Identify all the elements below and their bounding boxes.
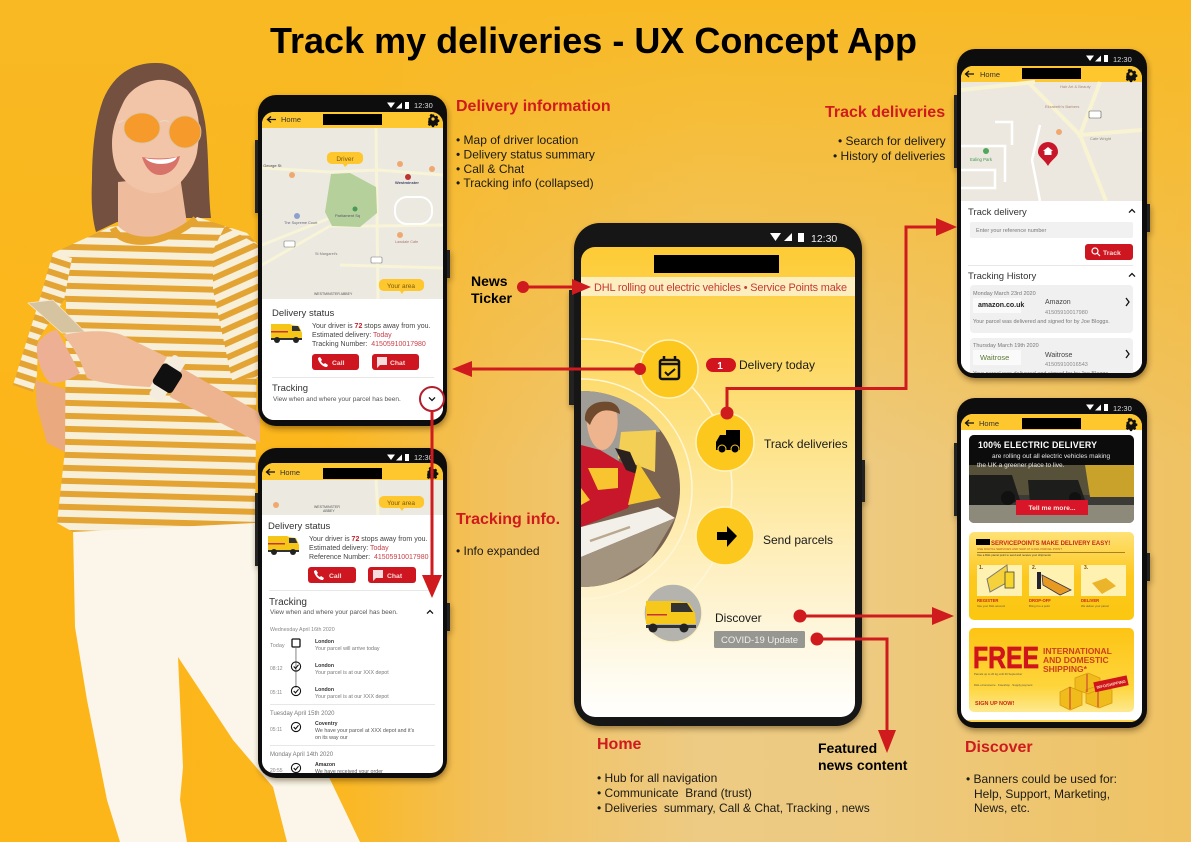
phone frame (569, 223, 865, 726)
banner: free shipping: Parcels up to 20 kg until 30 September (974, 672, 1022, 676)
label: discover: Discover (965, 739, 1033, 756)
collapse chevron (427, 611, 433, 614)
arrow: expand tracking to tracking info (420, 387, 444, 598)
your area bubble (379, 496, 424, 511)
timeline text: Tuesday April 15th 2020 (270, 711, 335, 717)
track deliveries bullets: • Search for delivery (838, 134, 946, 148)
map: Ealing Park (970, 157, 993, 162)
banner: free shipping: FREE (973, 640, 1039, 675)
history card: waitrose (970, 338, 1133, 373)
banner: servicepoints: We deliver your parcel (1081, 604, 1109, 608)
arrow: discover (794, 607, 954, 625)
neck (118, 176, 187, 240)
track button (1085, 244, 1133, 260)
phone frame (255, 448, 450, 778)
history card: amazon: Amazon (1045, 299, 1071, 306)
collapse chevron (1129, 210, 1135, 213)
delivery information bullets: • Map of driver location (456, 133, 578, 147)
phone: delivery information (255, 95, 450, 426)
delivery status text: Your driver is 72 stops away from you. (312, 323, 430, 330)
menu: send parcels: Send parcels (763, 533, 833, 547)
right sleeve (213, 226, 258, 380)
arrow: track deliveries (720, 218, 957, 420)
settings icon (427, 467, 438, 480)
arrow: delivery today to delivery information (452, 361, 646, 377)
history card: waitrose: Your parcel was delivered and signed for by Joe Bloggs. (973, 371, 1110, 377)
menu: discover (644, 584, 762, 642)
banner: servicepoints: 2. (1032, 565, 1037, 571)
phone: track deliveries (954, 49, 1150, 383)
track delivery panel: Enter your reference number (976, 228, 1046, 234)
delivery status heading: Delivery status (272, 308, 335, 319)
phone in hand (28, 300, 85, 333)
delivery information bullets: • Delivery status summary (456, 148, 595, 162)
home bullets: • Deliveries summary, Call & Chat, Tracking , news (597, 801, 870, 815)
status bar (387, 453, 433, 462)
menu: delivery today (640, 340, 815, 398)
tracking subtext: View when and where your parcel has been. (273, 396, 401, 403)
history card: waitrose: Waitrose (1045, 352, 1072, 359)
discover bullets (966, 772, 1117, 815)
banner: servicepoints: DROP-OFF (1029, 598, 1051, 603)
forearm (170, 367, 260, 443)
banner: free shipping: SHIPPING* (1043, 664, 1088, 674)
back home (268, 115, 301, 124)
shirt (40, 217, 258, 532)
label: news ticker: Ticker (471, 290, 513, 306)
timeline text: We have your parcel at XXX depot and it's (315, 728, 415, 734)
label: featured news content: news content (818, 757, 908, 773)
map: Westminster (395, 180, 419, 185)
history card: amazon: 41505910017980 (1045, 310, 1088, 316)
menu: send parcels (696, 507, 833, 565)
track delivery panel (961, 201, 1142, 373)
call button (312, 354, 359, 370)
call button: Call (329, 573, 342, 580)
history card: amazon: Your parcel was delivered and signed for by Joe Bloggs. (973, 319, 1110, 325)
menu: delivery today: 1 (717, 361, 723, 372)
home bullets (597, 771, 870, 815)
delivery van (271, 324, 302, 343)
label: delivery information: Delivery information (456, 98, 611, 115)
delivery status text: Tracking Number: 41505910017980 (312, 341, 426, 348)
timeline text: Your parcel will arrive today (315, 646, 380, 652)
map: Cafe Wright (1090, 136, 1112, 141)
timeline text: Wednesday April 16th 2020 (270, 627, 335, 633)
tracking heading: Tracking (269, 597, 307, 608)
banner: servicepoints: Bring it to a point (1029, 604, 1050, 608)
driver bubble (327, 152, 363, 167)
timeline text: 05:11 (270, 727, 282, 733)
call button: Call (332, 360, 345, 367)
banner: free shipping: INTERNATIONAL (1043, 646, 1112, 656)
back home (966, 419, 999, 428)
delivery status text (309, 536, 429, 561)
map: Hair Art & Beauty (1060, 84, 1091, 89)
map: Elizabeth's Barbers (1045, 104, 1079, 109)
news ticker (581, 277, 855, 296)
status bar: 12:30 (1113, 55, 1132, 64)
banner: servicepoints: USE DIGITAL SERVICES AND SHIP AT A DHL PARCEL POINT (977, 547, 1062, 551)
label: tracking info: Tracking info. (456, 511, 560, 528)
delivery status text: Reference Number: 41505910017980 (309, 554, 429, 561)
banner: free shipping (969, 628, 1134, 712)
left hand (37, 330, 80, 383)
left arm (35, 380, 68, 452)
home bullets: • Communicate Brand (trust) (597, 786, 752, 800)
status bar (1086, 404, 1132, 413)
banner: servicepoints: SERVICEPOINTS MAKE DELIVERY EASY! (991, 541, 1110, 547)
timeline text: London (315, 639, 334, 645)
timeline text: 20:55 (270, 768, 283, 774)
discover bullets: News, etc. (974, 801, 1030, 815)
timeline text: on its way our (315, 735, 348, 741)
smile (142, 156, 180, 175)
delivery status heading: Delivery status (268, 521, 331, 532)
timeline text: Today (270, 643, 285, 649)
track delivery heading: Track delivery (968, 207, 1027, 218)
status bar: 12:30 (811, 233, 837, 245)
banner: servicepoints: Use a DHL parcel point to send and receive your shipments (977, 553, 1051, 557)
menu: delivery today: Delivery today (739, 358, 815, 372)
header bar (262, 463, 443, 480)
label: track deliveries: Track deliveries (825, 104, 945, 121)
menu: track deliveries: Track deliveries (764, 437, 848, 451)
label: news ticker: News (471, 273, 508, 289)
header bar (262, 112, 443, 128)
left sleeve (13, 253, 72, 392)
home screen background (581, 247, 855, 717)
track deliveries bullets (833, 134, 946, 163)
header bar (961, 66, 1142, 82)
title: Track my deliveries - UX Concept App (270, 20, 917, 61)
map (961, 82, 1142, 201)
timeline text: Amazon (315, 762, 335, 768)
banner: electric delivery (969, 435, 1134, 523)
history card: amazon: Monday March 23rd 2020 (973, 291, 1036, 297)
history card: waitrose: Thursday March 19th 2020 (973, 343, 1039, 349)
sunglasses (118, 113, 201, 148)
delivery information bullets: • Tracking info (collapsed) (456, 176, 594, 190)
phone frame (954, 398, 1150, 728)
label: home: Home (597, 736, 642, 753)
your area bubble: Your area (387, 500, 415, 507)
timeline text: 08:12 (270, 666, 283, 672)
status bar (770, 233, 837, 245)
banner: servicepoints: 3. (1084, 565, 1089, 571)
chat button: Chat (387, 573, 403, 580)
driver bubble: Driver (336, 156, 354, 163)
phone: discover (954, 398, 1150, 728)
banner: servicepoints (969, 532, 1134, 620)
history card: amazon: amazon.co.uk (978, 302, 1024, 309)
banner: electric delivery: the UK a greener place to live. (977, 462, 1065, 469)
timeline text: 05:11 (270, 690, 282, 696)
delivery information bullets: • Call & Chat (456, 162, 525, 176)
chat button: Chat (390, 360, 406, 367)
timeline text: London (315, 687, 334, 693)
discover bullets: • Banners could be used for: (966, 772, 1117, 786)
timeline text: Coventry (315, 721, 338, 727)
history card: waitrose: 41505910016543 (1045, 362, 1088, 368)
banner: servicepoints: DELIVER (1081, 598, 1099, 603)
center phone: home (566, 222, 870, 733)
banner: servicepoints: REGISTER (977, 598, 998, 603)
map: WESTMINSTER ABBEY (314, 292, 353, 296)
timeline text: Your parcel is at our XXX depot (315, 694, 389, 700)
status bar (387, 101, 433, 110)
status bar: 12:30 (1113, 404, 1132, 413)
call button (308, 567, 356, 583)
menu: discover: Discover (715, 611, 762, 625)
delivery status text: Estimated delivery: Today (312, 332, 392, 339)
status bar: 12:30 (414, 453, 433, 462)
history card: amazon (970, 285, 1133, 333)
delivery status text (312, 323, 430, 348)
your area bubble (379, 279, 424, 294)
banner: servicepoints: Use your DHL account (977, 604, 1005, 608)
banner: servicepoints: 1. (979, 565, 984, 571)
label: news ticker (471, 273, 513, 306)
timeline text: Monday April 14th 2020 (270, 752, 334, 758)
timeline text (270, 627, 435, 775)
hair (92, 63, 211, 232)
status text panel (262, 408, 443, 420)
news ticker: DHL rolling out electric vehicles • Service Points make (594, 282, 847, 294)
back home: Home (979, 419, 999, 428)
timeline text: London (315, 663, 334, 669)
map: t George St (261, 163, 282, 168)
track deliveries bullets: • History of deliveries (833, 149, 945, 163)
chat button (368, 567, 416, 583)
back home: Home (980, 70, 1000, 79)
header bar (961, 414, 1142, 430)
map strip (262, 480, 443, 515)
discover bullets: Help, Support, Marketing, (974, 787, 1110, 801)
label: featured news content: Featured (818, 740, 877, 756)
watch (145, 352, 190, 405)
arc lines (581, 338, 733, 600)
map: St Margaret's (315, 252, 338, 256)
trousers (73, 522, 360, 842)
phone: tracking info (255, 448, 450, 778)
back home: Home (281, 115, 301, 124)
status bar: 12:30 (414, 101, 433, 110)
delivery information bullets (456, 133, 595, 190)
banner: free shipping: AND DOMESTIC (1043, 655, 1109, 665)
tracking heading: Tracking (272, 383, 308, 394)
map: The Supreme Court (284, 221, 318, 225)
back home (966, 70, 1000, 79)
delivery van (268, 536, 299, 555)
face (112, 80, 199, 193)
covid update button (714, 631, 805, 648)
covid update button: COVID-19 Update (721, 635, 798, 646)
banner: electric delivery: 100% ELECTRIC DELIVERY (978, 440, 1097, 450)
chat button (372, 354, 419, 370)
banner: electric delivery: Tell me more... (1028, 505, 1076, 512)
back home: Home (280, 468, 300, 477)
menu: track deliveries (696, 413, 848, 471)
settings icon (1126, 69, 1137, 82)
settings icon (428, 114, 439, 127)
back home (266, 468, 300, 477)
photo of courier (581, 391, 680, 587)
map (261, 128, 443, 299)
label: featured news content (818, 740, 908, 773)
map: Parliament Sq (335, 213, 360, 218)
banner: free shipping: INFO/SHIPPING (1096, 679, 1126, 690)
phone frame (954, 49, 1150, 378)
tracking info bullet: • Info expanded (456, 544, 540, 558)
arrow: featured news content (810, 632, 896, 753)
phone frame (255, 95, 450, 426)
settings icon (1126, 418, 1137, 431)
banner: free shipping: DHL eCommerce · Freeshop · Supply payment (974, 683, 1033, 687)
banner: free shipping: SIGN UP NOW! (975, 701, 1014, 707)
delivery status text: Estimated delivery: Today (309, 545, 389, 552)
tracking subtext: View when and where your parcel has been. (270, 609, 398, 616)
tracking history heading: Tracking History (968, 271, 1037, 282)
timeline text: Your parcel is at our XXX depot (315, 670, 389, 676)
map strip: WESTMINSTER (314, 505, 340, 509)
map strip: ABBEY (323, 509, 335, 513)
banner: electric delivery: are rolling out all electric vehicles making (992, 453, 1111, 460)
arrow: news ticker (517, 279, 591, 295)
person holding a phone (13, 63, 360, 842)
status bar (1086, 55, 1132, 64)
location pin (1038, 142, 1058, 166)
timeline text: We have received your order (315, 769, 383, 775)
right hand (63, 331, 167, 387)
collar (113, 219, 196, 241)
history card: waitrose: Waitrose (980, 353, 1009, 362)
your area bubble: Your area (387, 283, 415, 290)
collapse chevron (1129, 274, 1135, 277)
delivery status text: Your driver is 72 stops away from you. (309, 536, 427, 543)
track button: Track (1103, 250, 1121, 257)
map: Lawdale Cafe (395, 240, 418, 244)
home bullets: • Hub for all navigation (597, 771, 717, 785)
